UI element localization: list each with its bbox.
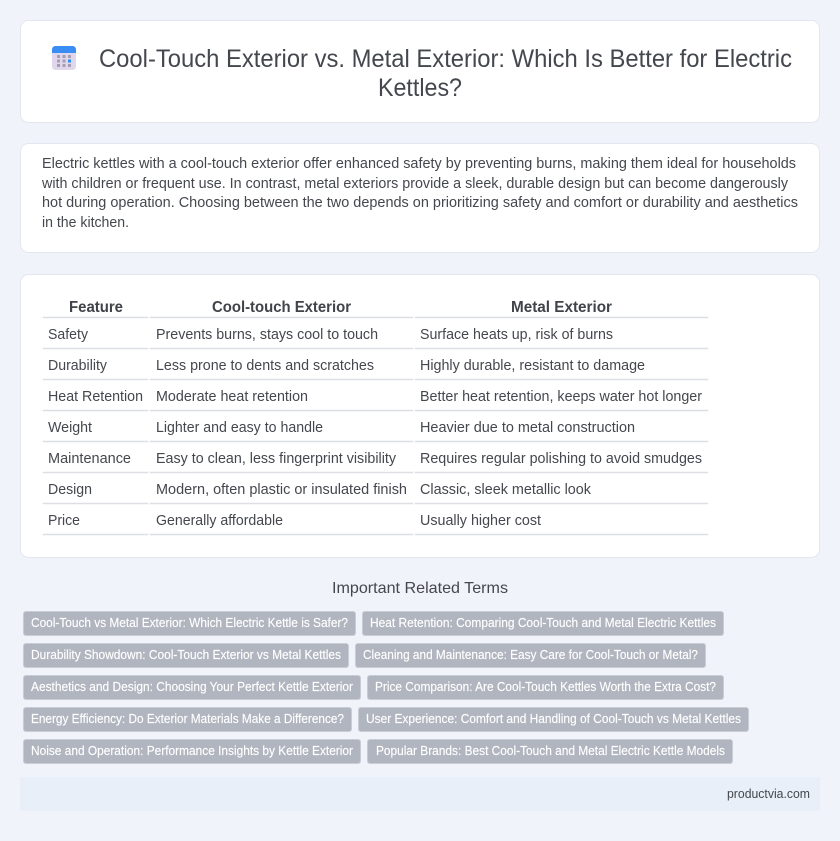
tag: noise: [24, 740, 360, 764]
table row: durability: Highly durable, resistant to damage: [420, 358, 645, 374]
tag: energy efficiency: [24, 708, 352, 732]
table row: design: Classic, sleek metallic look: [420, 482, 592, 498]
tag: heat retention: [362, 612, 724, 636]
footer bar: [20, 777, 820, 811]
panel: title card: [20, 20, 820, 122]
text block: introduction paragraph: Electric kettles with a cool-touch exterior offer enhanced safety by preventing burns, making them ideal for households: [42, 156, 796, 172]
table row: maintenance: Easy to clean, less fingerprint visibility: [156, 451, 397, 467]
table header row: [69, 299, 612, 316]
icon: calendar grid: [52, 46, 76, 70]
table row: weight: [48, 420, 635, 436]
table row: price: Usually higher cost: [420, 513, 541, 529]
panel: comparison table: [20, 274, 820, 558]
tag: cleaning: [356, 644, 706, 668]
table row: design: Design: [48, 482, 92, 498]
tag: cleaning: Cleaning and Maintenance: Easy Care for Cool-Touch or Metal?: [363, 648, 698, 662]
tag: aesthetics: [24, 676, 360, 700]
heading: title: Cool-Touch Exterior vs. Metal Exterior: Which Is Better for Electric: [99, 45, 792, 73]
tag cloud: related terms: [24, 612, 748, 764]
text block: introduction paragraph: with children or frequent use. In contrast, metal exteriors provide a sleek, durable design but can become dangerously: [41, 176, 789, 192]
table row: heat retention: [48, 389, 702, 405]
table row: weight: Heavier due to metal construction: [420, 420, 635, 436]
tag: user experience: User Experience: Comfort and Handling of Cool-Touch vs Metal Kettles: [366, 712, 741, 726]
tag: noise: Noise and Operation: Performance Insights by Kettle Exterior: [31, 744, 353, 758]
text block: introduction paragraph: in the kitchen.: [42, 215, 129, 231]
table row: durability: [48, 358, 645, 374]
table row: maintenance: Maintenance: [48, 451, 131, 467]
heading: title: [99, 45, 792, 102]
footer source text: productvia.com: [727, 787, 810, 801]
table row: design: [48, 482, 592, 498]
table row: heat retention: Better heat retention, keeps water hot longer: [420, 389, 702, 405]
tag: price: [368, 676, 724, 700]
table row: heat retention: Moderate heat retention: [156, 389, 308, 405]
text block: introduction paragraph: [41, 156, 798, 231]
table row: weight: Lighter and easy to handle: [156, 420, 323, 436]
table row: design: Modern, often plastic or insulated finish: [156, 482, 407, 498]
tag: heat retention: Heat Retention: Comparing Cool-Touch and Metal Electric Kettles: [370, 616, 716, 630]
tag: safer kettle: Cool-Touch vs Metal Exterior: Which Electric Kettle is Safer?: [31, 616, 348, 630]
table row: safety: Surface heats up, risk of burns: [420, 327, 613, 343]
table header row: Feature: [69, 299, 123, 316]
tag: popular brands: Popular Brands: Best Cool-Touch and Metal Electric Kettle Models: [376, 744, 725, 758]
table row: safety: [48, 327, 613, 343]
table row: durability: Less prone to dents and scratches: [156, 358, 374, 374]
table row: price: Generally affordable: [156, 513, 283, 529]
table row: maintenance: [48, 451, 702, 467]
text block: introduction paragraph: hot during operation. Choosing between the two depends on prioritizing safety and comfort or durability and aesthetics: [42, 195, 798, 211]
table row: heat retention: Heat Retention: [48, 389, 143, 405]
tag: price: Price Comparison: Are Cool-Touch Kettles Worth the Extra Cost?: [375, 680, 716, 694]
table row: maintenance: Requires regular polishing to avoid smudges: [420, 451, 702, 467]
tag: durability: [24, 644, 348, 668]
table row: safety: Safety: [48, 327, 89, 343]
tag: aesthetics: Aesthetics and Design: Choosing Your Perfect Kettle Exterior: [31, 680, 353, 694]
panel: introduction: [20, 144, 820, 252]
tag: durability: Durability Showdown: Cool-Touch Exterior vs Metal Kettles: [31, 648, 341, 662]
tag: popular brands: [368, 740, 732, 764]
tag: safer kettle: [24, 612, 356, 636]
heading: important related terms: Important Related Terms: [332, 580, 508, 597]
tag: energy efficiency: Energy Efficiency: Do Exterior Materials Make a Difference?: [31, 712, 344, 726]
tag: user experience: [358, 708, 748, 732]
table row: durability: Durability: [48, 358, 108, 374]
table row: price: [48, 513, 541, 529]
table header row: Metal Exterior: [511, 299, 612, 316]
table header row: Cool-touch Exterior: [212, 299, 351, 316]
heading: title: Kettles?: [378, 74, 462, 102]
table row: price: Price: [48, 513, 80, 529]
table row: weight: Weight: [48, 420, 92, 436]
table row: safety: Prevents burns, stays cool to touch: [156, 327, 378, 343]
